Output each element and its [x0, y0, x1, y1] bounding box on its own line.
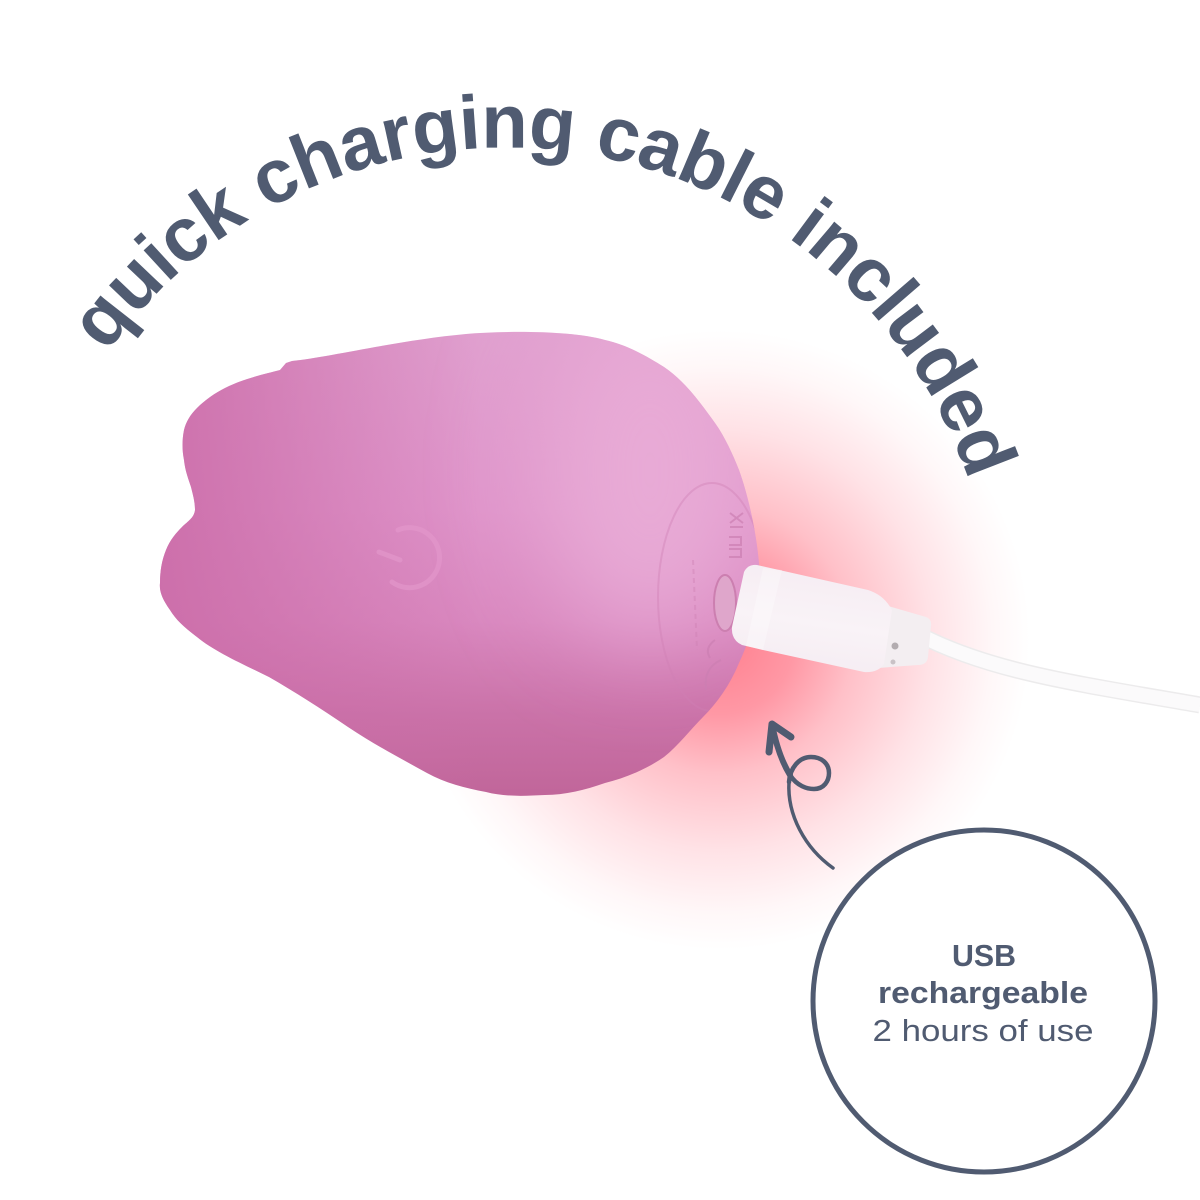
- neck holes: [892, 642, 898, 650]
- connector cap: [732, 565, 892, 672]
- glow behind the product: [400, 320, 1040, 960]
- callout circle: [813, 830, 1155, 1172]
- callout text: USB: [952, 938, 1016, 973]
- callout text: rechargeable: [878, 975, 1088, 1010]
- title: curved heading: quick charging cable included: [82, 94, 1019, 476]
- callout text: [872, 938, 1094, 1048]
- connector neck: [878, 606, 931, 668]
- cable wire: [918, 634, 1200, 705]
- charging port: [714, 575, 736, 631]
- arrow pointing to the port: [769, 724, 833, 868]
- power icon: [379, 528, 440, 588]
- cap seam: [746, 568, 782, 650]
- device body: [160, 332, 760, 796]
- embossed marks: [693, 513, 743, 690]
- callout text: 2 hours of use: [872, 1013, 1094, 1048]
- base panel: [657, 482, 754, 634]
- product: pink silicone device: [160, 332, 760, 796]
- charging cable: [732, 565, 1200, 705]
